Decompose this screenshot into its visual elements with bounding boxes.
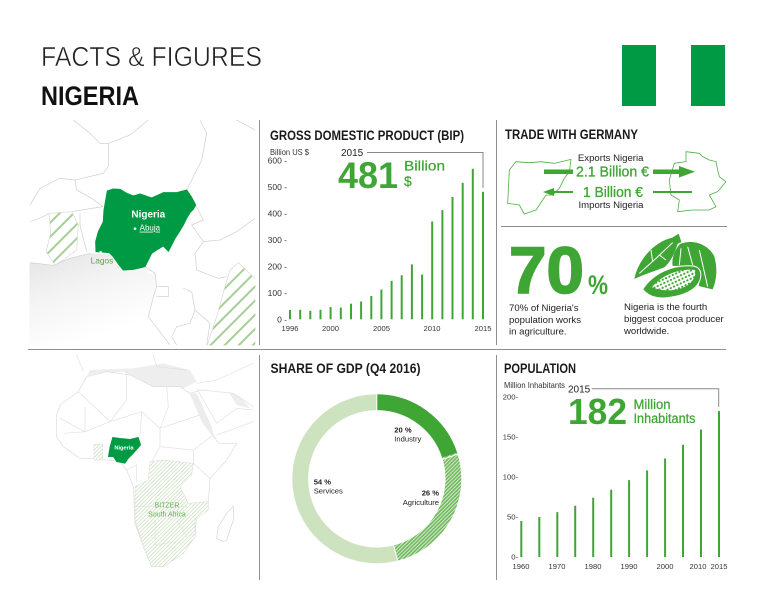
segment: industry [377, 402, 450, 455]
hatched area: South Africa group [207, 263, 257, 347]
chart: GDP bars: 2010 [424, 324, 440, 333]
labels: donut: 54 % [314, 477, 331, 486]
callout: population 2015: Inhabitants [634, 411, 696, 426]
labels: donut: 26 % [422, 489, 439, 498]
labels: donut: Services [314, 487, 343, 496]
chart: GDP bars: 600 - [268, 156, 287, 166]
map outline: Nigeria [508, 159, 571, 214]
heading: GDP: GROSS DOMESTIC PRODUCT (BIP) [270, 128, 464, 143]
chart: GDP bars: 1996 [282, 324, 298, 333]
label: Lagos: Lagos [91, 255, 113, 265]
chart: population bars: 1980 [585, 562, 601, 571]
chart: GDP bars: 2005 [373, 324, 390, 333]
chart: population bars: 100- [503, 472, 518, 482]
labels: donut [314, 426, 439, 507]
callout: population 2015: Million [634, 397, 670, 412]
label: Abuja [134, 224, 160, 232]
chart: GDP bars: Billion US $ [270, 147, 309, 157]
callout: population 2015: 182 [568, 391, 627, 432]
chart: GDP bars: 500 - [268, 182, 287, 192]
chart: population bars [503, 380, 727, 571]
hatched area: Ghana [94, 444, 103, 460]
callout: population 2015 [568, 384, 719, 432]
heading: trade: TRADE WITH GERMANY [505, 127, 638, 142]
text: cocoa producer: worldwide. [623, 326, 669, 337]
callout: GDP 2015: Billion [404, 158, 445, 174]
arrow: imports [543, 188, 692, 196]
chart: population bars: 50- [507, 512, 518, 522]
map outline: Germany [669, 152, 726, 212]
chart: GDP bars: 300 - [268, 235, 287, 245]
text: agriculture share: 70% of Nigeria's [509, 303, 579, 314]
label: Lagos [91, 251, 113, 265]
donut chart [300, 394, 458, 562]
chart: population bars: 1970 [549, 562, 565, 571]
label: BITZER South Africa: South Africa [148, 512, 186, 519]
stat: 70 percent: 70 [509, 233, 584, 307]
chart: population bars: 150- [503, 432, 518, 442]
Nigeria shape [108, 437, 141, 463]
title [41, 41, 262, 111]
icon: Nigerian flag [622, 45, 725, 106]
labels: donut: Industry [394, 435, 422, 444]
text: agriculture share: population works [509, 315, 581, 326]
diagram: trade with Germany: 2.1 Billion € [576, 164, 649, 180]
diagram: trade with Germany: Exports Nigeria [578, 153, 644, 164]
callout: population 2015: 2015 [568, 384, 591, 396]
chart: population bars: 200- [503, 392, 518, 402]
arrow: exports [544, 166, 695, 178]
chart: population bars: 2000 [657, 562, 673, 571]
heading: population: POPULATION [504, 361, 576, 376]
hatched area: Ghana [46, 212, 78, 265]
labels: donut: 20 % [394, 426, 412, 434]
chart: population bars: 1960 [513, 562, 529, 571]
callout: GDP 2015: 481 [338, 155, 398, 196]
stat: 70 percent: % [588, 270, 608, 300]
icon: cocoa pod [634, 234, 716, 298]
text: cocoa producer: Nigeria is the fourth [624, 302, 707, 313]
label: Nigeria: Nigeria [114, 445, 134, 451]
hatched area: South Africa region [135, 460, 208, 567]
chart: population bars: 0- [511, 552, 518, 562]
chart: GDP bars: 2000 [322, 324, 339, 333]
segment: agriculture [396, 455, 453, 553]
Nigeria shape [96, 189, 196, 270]
text: cocoa producer: biggest cocoa producer [624, 314, 725, 325]
label: Abuja: Abuja [140, 224, 161, 233]
title: FACTS & FIGURES [41, 41, 262, 72]
title: NIGERIA [41, 81, 139, 111]
segment: services [300, 402, 396, 555]
panel: Nigeria regional map [29, 120, 257, 347]
chart: GDP bars [268, 147, 491, 333]
chart: GDP bars: 400 - [268, 208, 287, 218]
chart: GDP bars: 100 - [268, 288, 287, 298]
chart: GDP bars: 2015 [475, 324, 491, 333]
heading: share of GDP: SHARE OF GDP (Q4 2016) [270, 361, 420, 376]
label: Nigeria: Nigeria [131, 209, 166, 220]
chart: population bars: 2015 [711, 562, 727, 571]
chart: population bars: Million Inhabitants [504, 380, 565, 390]
chart: GDP bars: 200 - [268, 262, 287, 272]
diagram: trade with Germany: 1 Billion € [583, 185, 643, 201]
diagram: trade with Germany [508, 152, 726, 214]
diagram: trade with Germany: Imports Nigeria [578, 200, 644, 211]
callout: GDP 2015: 2015 [341, 148, 364, 159]
callout: GDP 2015: $ [404, 173, 412, 189]
labels: donut: Agriculture [403, 498, 439, 507]
panel: Africa map [57, 355, 253, 567]
chart: GDP bars: 0 - [277, 314, 287, 324]
label: BITZER South Africa: BITZER [155, 502, 179, 509]
text: agriculture share: in agriculture. [509, 326, 567, 338]
callout: GDP 2015 [338, 148, 483, 196]
chart: population bars: 1990 [621, 562, 637, 571]
chart: population bars: 2010 [690, 562, 706, 571]
